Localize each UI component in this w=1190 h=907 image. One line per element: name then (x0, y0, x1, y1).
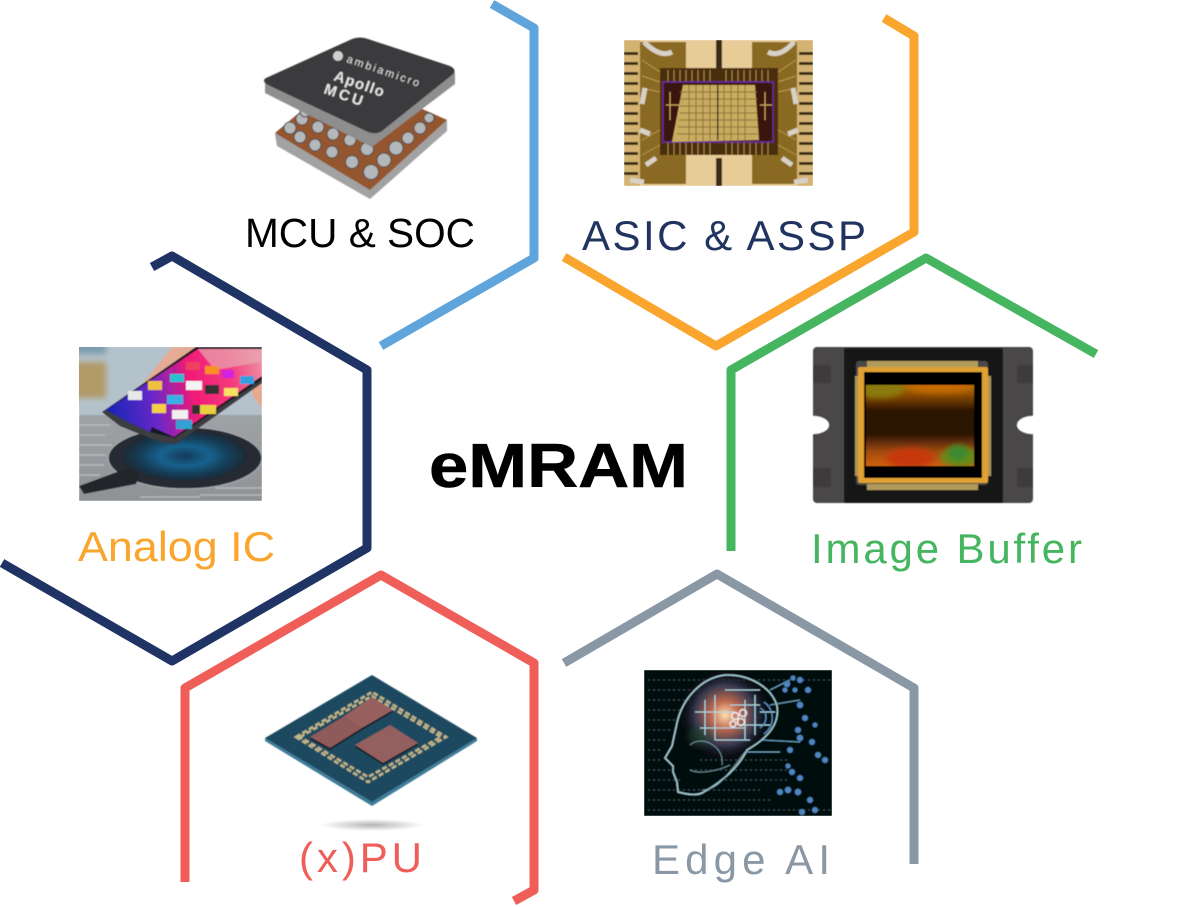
icon: MCU chip (264, 38, 455, 199)
label: MCU & SOC: MCU & SOC (245, 210, 475, 256)
icon: processor shadow (320, 819, 424, 831)
hexagon outline: Image Buffer (731, 258, 1096, 551)
label: (x)PU: (x)PU (299, 834, 422, 881)
icon: image sensor (812, 346, 1034, 504)
icon: MCU chip: MCU (322, 81, 365, 110)
label: ASIC & ASSP: ASIC & ASSP (582, 212, 866, 259)
label: Edge AI: Edge AI (652, 836, 830, 883)
hexagon outline: ASIC & ASSP (564, 18, 914, 346)
label: Image Buffer: Image Buffer (811, 525, 1082, 572)
hexagon outline: (x)PU (185, 575, 534, 901)
icon: MCU chip: Apollo (332, 68, 386, 101)
icon: phone on wireless charger (70, 340, 262, 501)
icon: MCU chip: ambiamicro (345, 53, 421, 90)
icon: ASIC die photo (624, 40, 813, 186)
hexagon outline: MCU & SOC (381, 4, 534, 346)
hexagon outline: Analog IC (2, 256, 367, 661)
hexagon outline: Edge AI (564, 574, 914, 864)
icon: processor package (265, 675, 477, 806)
center title: eMRAM: eMRAM (429, 432, 688, 501)
icon: AI head (644, 669, 832, 816)
label: Analog IC: Analog IC (78, 523, 275, 570)
